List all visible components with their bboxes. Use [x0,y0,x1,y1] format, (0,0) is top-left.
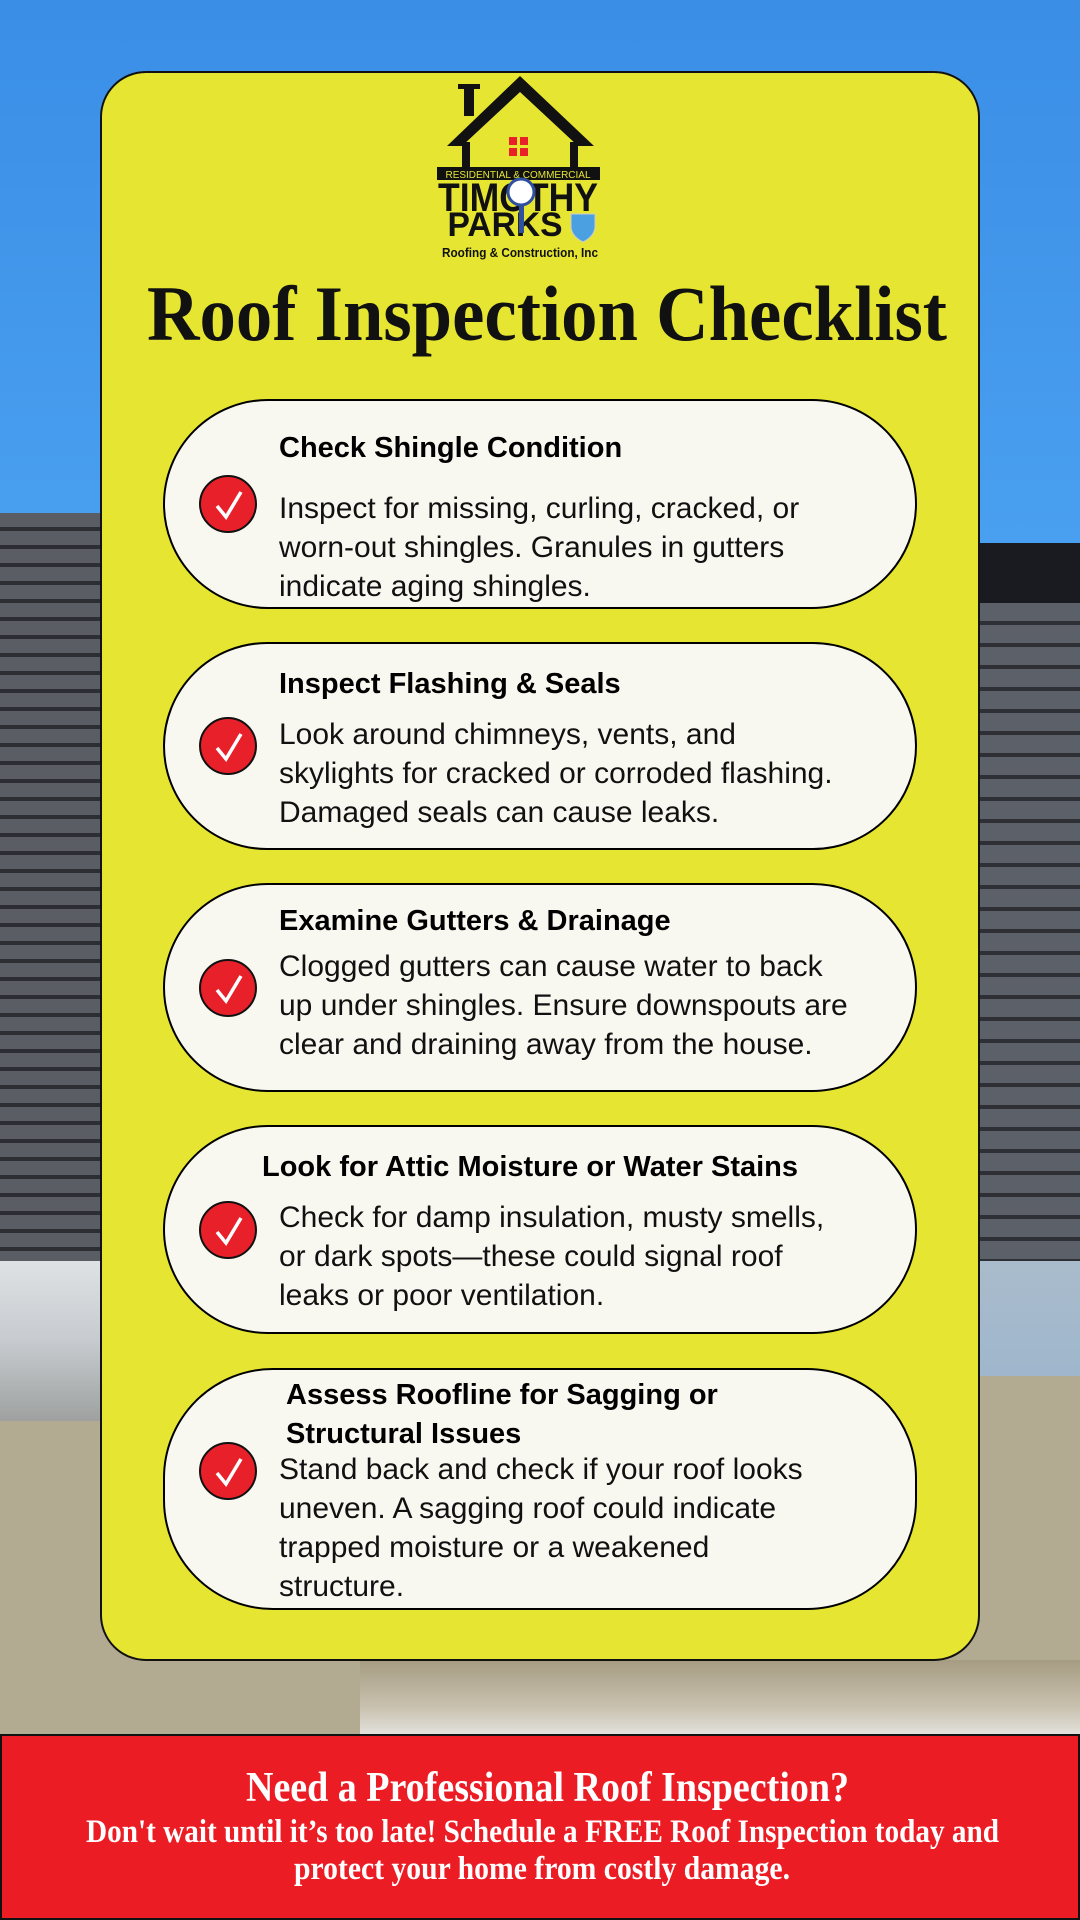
body: or dark spots—these could signal roof [279,1240,783,1273]
heading: Check Shingle Condition [279,432,622,464]
body: clear and draining away from the house. [279,1028,813,1061]
body: Damaged seals can cause leaks. [279,796,719,829]
icon: check [199,475,257,533]
item 1 [163,399,917,609]
heading: Examine Gutters & Drainage [279,905,671,937]
logo: PARKS [448,206,562,244]
body [279,718,833,829]
footer CTA [0,1734,1080,1920]
body: Inspect for missing, curling, cracked, or [279,492,799,525]
body [279,492,799,603]
body: trapped moisture or a weakened [279,1531,709,1564]
body: indicate aging shingles. [279,570,591,603]
heading: Structural Issues [286,1418,521,1450]
body: Check for damp insulation, musty smells, [279,1201,824,1234]
item 4 [163,1125,917,1334]
icon: check [199,1201,257,1259]
body: Look around chimneys, vents, and [279,718,736,751]
footer line 2: protect your home from costly damage. [294,1851,790,1887]
body: structure. [279,1570,404,1603]
logo: Roofing & Construction, Inc [442,245,598,260]
body: leaks or poor ventilation. [279,1279,604,1312]
footer headline: Need a Professional Roof Inspection? [246,1765,849,1811]
body [279,950,848,1061]
body: Clogged gutters can cause water to back [279,950,823,983]
body: Stand back and check if your roof looks [279,1453,803,1486]
body: uneven. A sagging roof could indicate [279,1492,776,1525]
logo [437,76,600,260]
heading: Assess Roofline for Sagging or [286,1379,718,1411]
body [279,1201,824,1312]
main card [100,71,980,1661]
body: worn-out shingles. Granules in gutters [279,531,784,564]
heading: Inspect Flashing & Seals [279,668,621,700]
body: up under shingles. Ensure downspouts are [279,989,848,1022]
item 5 [163,1368,917,1610]
icon: check [199,717,257,775]
icon: check [199,1442,257,1500]
item 2 [163,642,917,850]
icon: check [199,959,257,1017]
heading [286,1379,718,1450]
body: skylights for cracked or corroded flashing. [279,757,833,790]
body [279,1453,803,1603]
item 3 [163,883,917,1092]
heading: Look for Attic Moisture or Water Stains [262,1151,798,1183]
logo: RESIDENTIAL & COMMERCIAL [446,170,591,181]
